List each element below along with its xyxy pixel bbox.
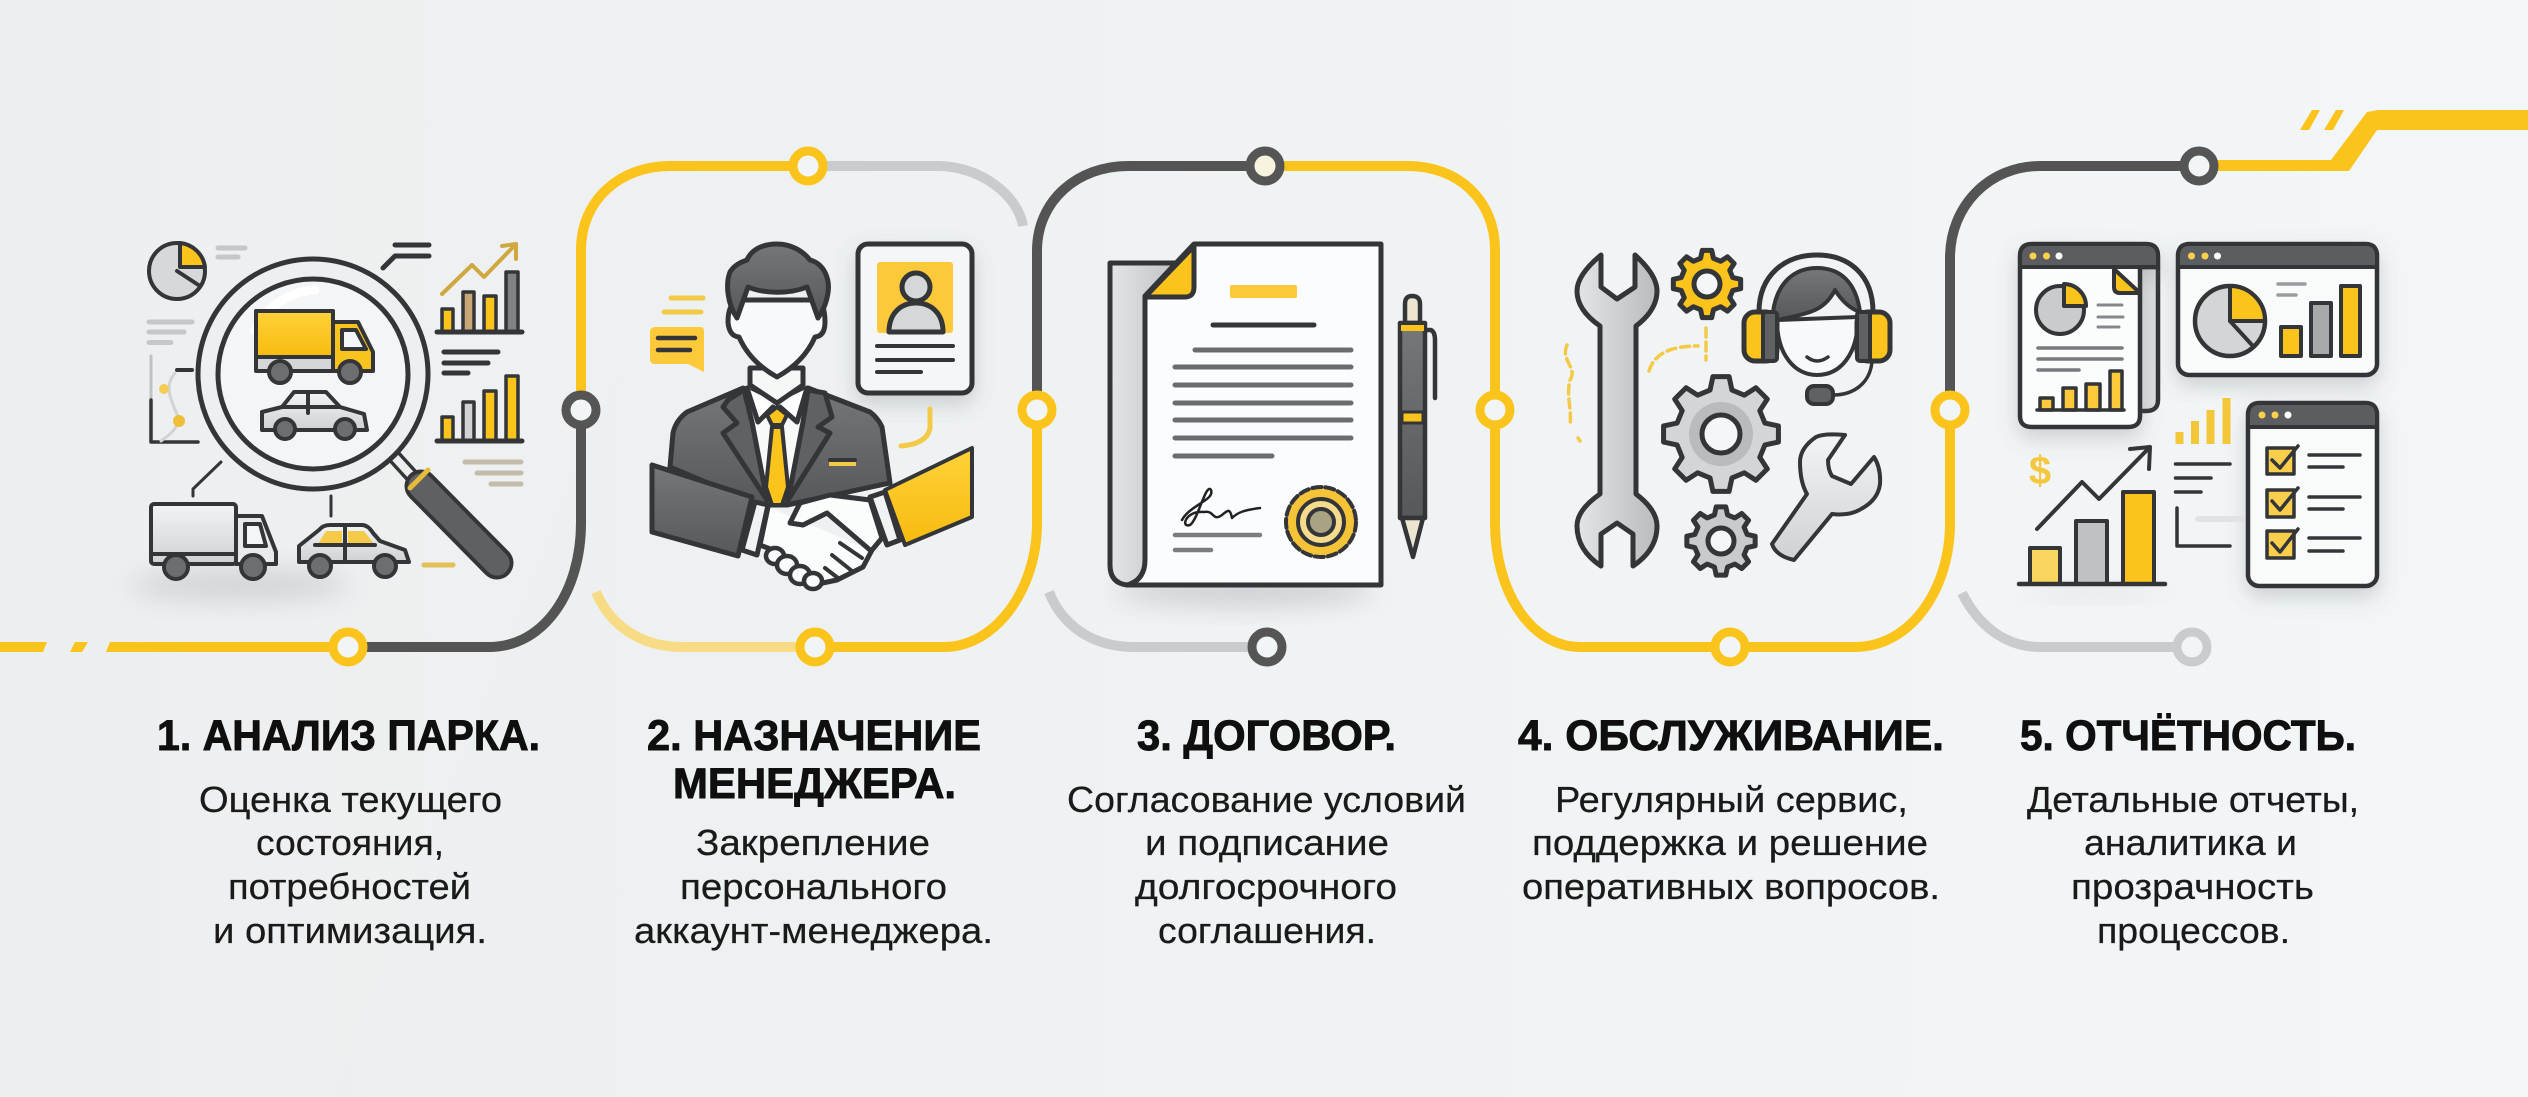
cuffs bbox=[742, 492, 900, 555]
step 5 text: процессов. bbox=[2097, 910, 2290, 951]
icon 2: manager and handshake bbox=[650, 244, 972, 589]
large grey gear bbox=[1664, 377, 1778, 491]
growth bar chart with arrow bbox=[2019, 447, 2165, 598]
step 1 text: состояния, bbox=[256, 822, 444, 863]
step 2 text bbox=[634, 712, 993, 951]
front page bbox=[1127, 244, 1381, 585]
step 4 text: оперативных вопросов. bbox=[1522, 866, 1940, 907]
bar chart top bbox=[437, 244, 522, 332]
step 1 text: 1. АНАЛИЗ ПАРКА. bbox=[157, 712, 540, 760]
step 5 text: Детальные отчеты, bbox=[2027, 779, 2359, 820]
step 2 text: аккаунт-менеджера. bbox=[634, 910, 993, 951]
bar chart bottom bbox=[437, 376, 522, 441]
icon 3: contract document bbox=[1110, 244, 1435, 606]
yellow gear bbox=[1673, 250, 1741, 318]
small yellow bars bbox=[2176, 398, 2230, 444]
step 2 text: Закрепление bbox=[696, 822, 930, 863]
step 4 text: Регулярный сервис, bbox=[1555, 779, 1908, 820]
step 2 text: персонального bbox=[680, 866, 947, 907]
car with yellow windows bbox=[299, 525, 409, 577]
step 4 text: 4. ОБСЛУЖИВАНИЕ. bbox=[1518, 712, 1944, 760]
shirt bbox=[738, 388, 815, 500]
icon 5: reports and dashboards bbox=[2019, 244, 2377, 598]
step 3 text: и подписание bbox=[1145, 822, 1389, 863]
step 3 text: 3. ДОГОВОР. bbox=[1137, 712, 1396, 760]
seal bbox=[1286, 487, 1356, 557]
document heading bbox=[1230, 285, 1297, 298]
step 5 text bbox=[2020, 712, 2359, 951]
step 1 text bbox=[157, 712, 540, 951]
step 2 text: 2. НАЗНАЧЕНИЕ bbox=[647, 712, 981, 760]
folded corner bbox=[1145, 246, 1194, 297]
line chart left bbox=[151, 356, 198, 442]
suit jacket bbox=[670, 388, 890, 505]
small grey gear bbox=[1687, 507, 1755, 575]
step 5 text: аналитика и bbox=[2084, 822, 2297, 863]
pocket bbox=[829, 459, 856, 466]
lapels bbox=[723, 390, 832, 500]
connector path: lines and nodes bbox=[0, 110, 2528, 652]
small wrench bbox=[1772, 434, 1880, 560]
icon 1: fleet analysis bbox=[130, 243, 522, 601]
step 1 text: потребностей bbox=[228, 866, 471, 907]
dashboard window bbox=[2178, 244, 2377, 375]
step 1 text: Оценка текущего bbox=[199, 779, 502, 820]
neck and head bbox=[728, 244, 828, 403]
step 5 text: прозрачность bbox=[2071, 866, 2314, 907]
grey truck bbox=[151, 504, 276, 579]
document text lines bbox=[1175, 350, 1351, 456]
small text lines and callouts bbox=[149, 245, 521, 565]
signature bbox=[1182, 489, 1260, 525]
tie bbox=[766, 407, 788, 505]
support agent with headset bbox=[1744, 255, 1890, 404]
pie chart small bbox=[149, 243, 205, 299]
step 5 text: 5. ОТЧЁТНОСТЬ. bbox=[2020, 712, 2356, 760]
node markers bbox=[333, 151, 2214, 662]
chat bubble bbox=[650, 327, 704, 372]
yellow truck bbox=[256, 311, 373, 383]
dollar sign: $ bbox=[2029, 449, 2051, 493]
car in lens bbox=[262, 392, 367, 439]
report document window bbox=[2020, 244, 2158, 427]
right sleeve bbox=[885, 448, 972, 545]
back page bbox=[1110, 263, 1190, 585]
step 3 text: долгосрочного bbox=[1135, 866, 1397, 907]
handshake bbox=[760, 495, 882, 585]
step 4 text: поддержка и решение bbox=[1532, 822, 1928, 863]
note lines and bracket bbox=[2176, 464, 2230, 546]
step 1 text: и оптимизация. bbox=[213, 910, 487, 951]
yellow dashed accents bbox=[1565, 328, 1706, 441]
step 3 text: Согласование условий bbox=[1067, 779, 1466, 820]
id card bbox=[858, 244, 972, 393]
step 2 text: МЕНЕДЖЕРА. bbox=[673, 760, 956, 808]
large wrench bbox=[1577, 255, 1657, 566]
step 3 text bbox=[1067, 712, 1466, 951]
icon 4: service tools and support bbox=[1565, 250, 1890, 575]
step 3 text: соглашения. bbox=[1158, 910, 1376, 951]
pen bbox=[1400, 296, 1435, 557]
left sleeve bbox=[652, 465, 752, 556]
checklist window bbox=[2248, 403, 2377, 586]
magnifying glass bbox=[198, 259, 497, 563]
step 4 text bbox=[1518, 712, 1944, 907]
